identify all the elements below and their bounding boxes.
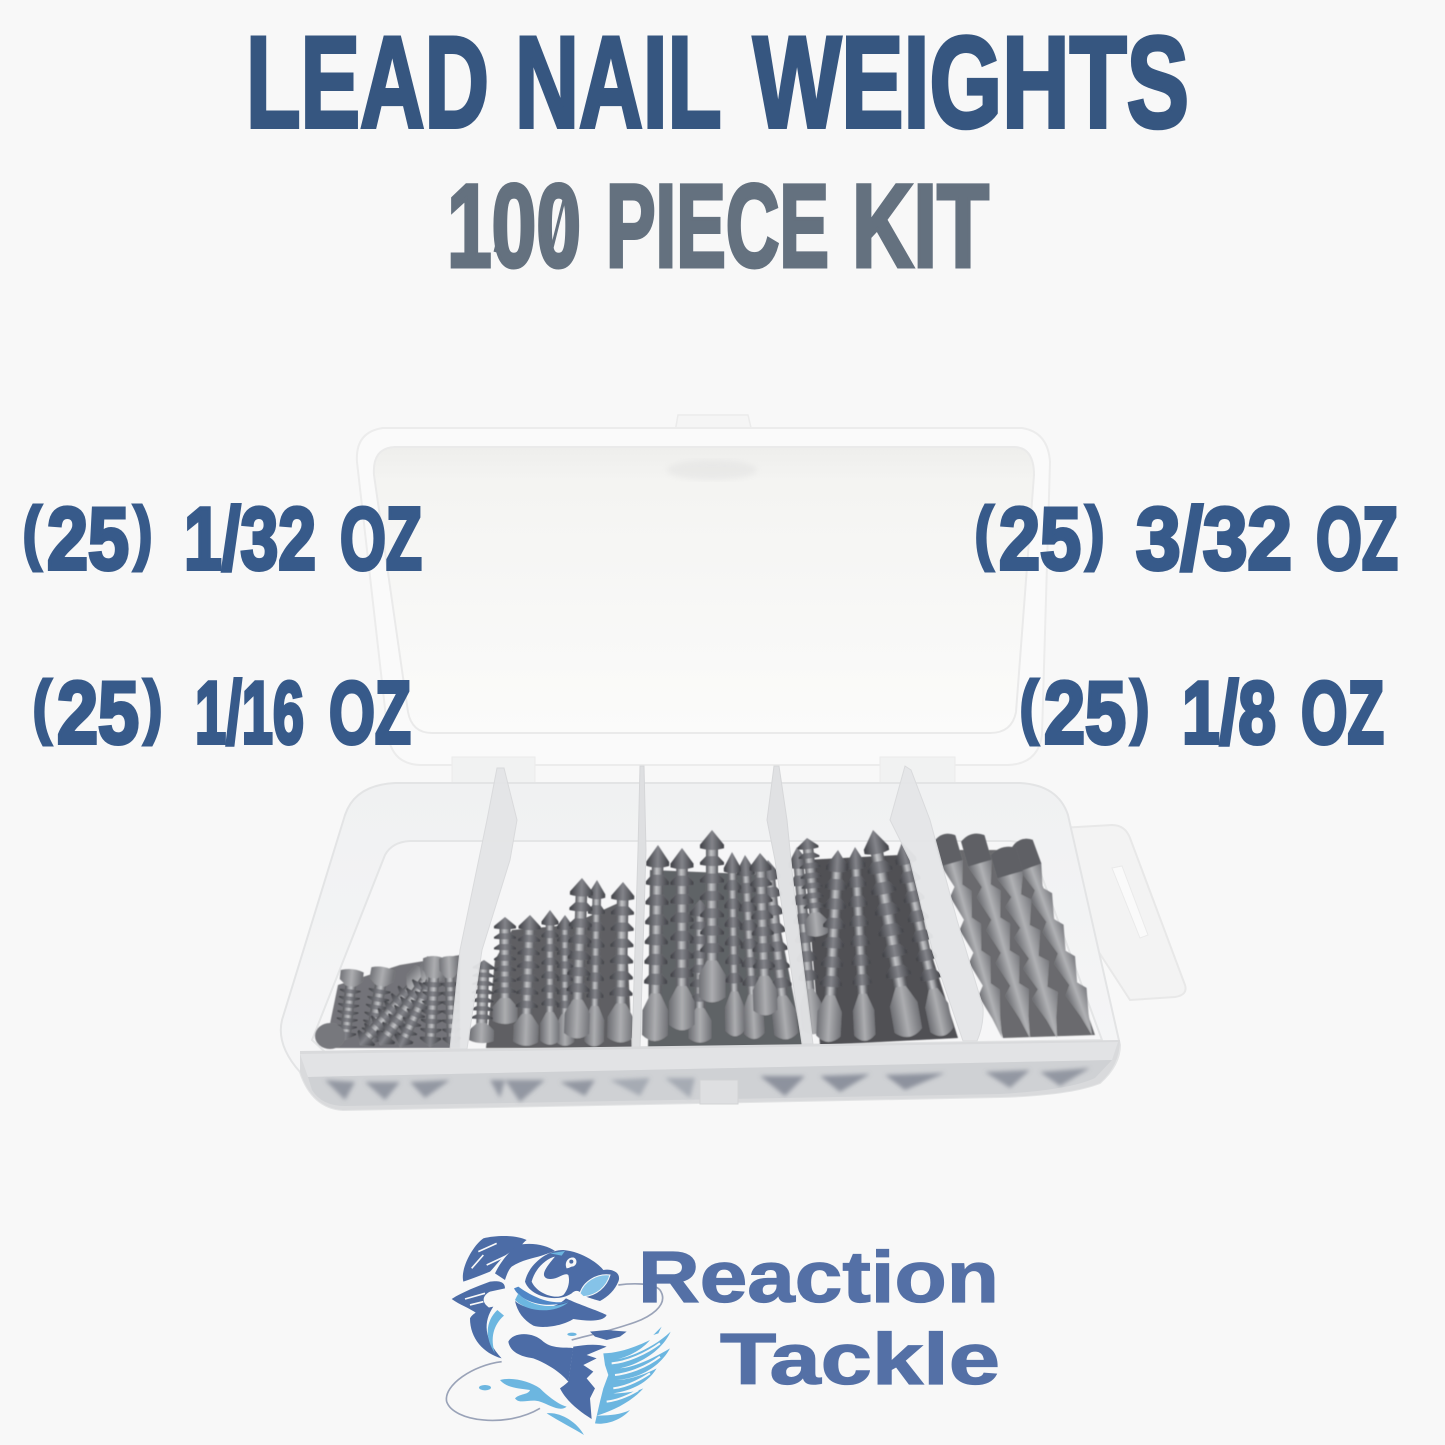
box tab bbox=[1060, 825, 1186, 1000]
label: 1/8 oz: OZ bbox=[1301, 663, 1384, 762]
box base bbox=[281, 783, 1120, 1110]
nails: compartment 2 bbox=[469, 878, 636, 1048]
mouth bbox=[580, 1275, 610, 1297]
title: LEAD bbox=[246, 9, 489, 155]
lower jaw bbox=[515, 1298, 607, 1327]
label: 1/32 oz: 25 bbox=[47, 489, 129, 588]
logo wordmark: Reaction: Reaction bbox=[638, 1238, 999, 1318]
label: 3/32 oz: ) bbox=[1086, 493, 1104, 571]
title: NAIL bbox=[515, 9, 720, 155]
label: 1/32 oz: ) bbox=[134, 493, 152, 571]
base inner rim bbox=[312, 841, 1102, 1052]
splash bbox=[479, 1327, 671, 1435]
label: 3/32 oz: 25 bbox=[999, 489, 1081, 588]
front wall with nail shadows bbox=[300, 1040, 1120, 1110]
tail fin bbox=[452, 1281, 505, 1313]
subtitle: PIECE bbox=[606, 160, 829, 292]
subtitle bbox=[447, 160, 989, 292]
belly fin bbox=[508, 1334, 573, 1382]
title: WEIGHTS bbox=[753, 9, 1189, 155]
label: 1/16 oz: 25 bbox=[57, 663, 139, 762]
dividers bbox=[450, 766, 983, 1049]
nails: compartment 4 bbox=[786, 828, 958, 1045]
head bbox=[525, 1250, 619, 1301]
label: 3/32 oz: ( bbox=[975, 493, 994, 571]
label: 1/32 oz: ( bbox=[23, 493, 42, 571]
fishing line bbox=[446, 1284, 663, 1420]
label: 1/16 oz: ) bbox=[144, 667, 162, 745]
label: 3/32 oz: OZ bbox=[1316, 489, 1398, 588]
nails: compartment 5 bbox=[933, 831, 1102, 1042]
product photo: open plastic box bbox=[281, 415, 1186, 1110]
label: 1/32 oz: OZ bbox=[340, 489, 422, 588]
label: 1/16 oz: OZ bbox=[329, 663, 411, 762]
label: 1/16 oz: 1/16 bbox=[195, 663, 304, 762]
lure bbox=[590, 1330, 627, 1340]
hinges bbox=[452, 757, 955, 800]
nails: compartment 3 bbox=[642, 830, 803, 1048]
label: 1/8 oz: ( bbox=[1020, 667, 1039, 745]
nails: compartment 1 bbox=[315, 954, 462, 1053]
box lid bbox=[357, 415, 1050, 765]
label: 1/8 oz: ) bbox=[1131, 667, 1149, 745]
subtitle: 100 bbox=[447, 160, 581, 292]
label: 1/32 oz: 1/32 bbox=[184, 489, 316, 588]
subtitle: KIT bbox=[852, 160, 989, 292]
label: 1/8 oz: 25 bbox=[1044, 663, 1126, 762]
lower tail bbox=[560, 1345, 607, 1419]
dorsal fin bbox=[463, 1236, 527, 1282]
body bbox=[470, 1307, 502, 1358]
label: 1/16 oz: ( bbox=[33, 667, 52, 745]
logo: fish mark bbox=[446, 1236, 671, 1435]
logo wordmark: Tackle: Tackle bbox=[720, 1320, 1000, 1400]
label: 3/32 oz: 3/32 bbox=[1136, 489, 1292, 588]
label: 1/8 oz: 1/8 bbox=[1182, 663, 1276, 762]
